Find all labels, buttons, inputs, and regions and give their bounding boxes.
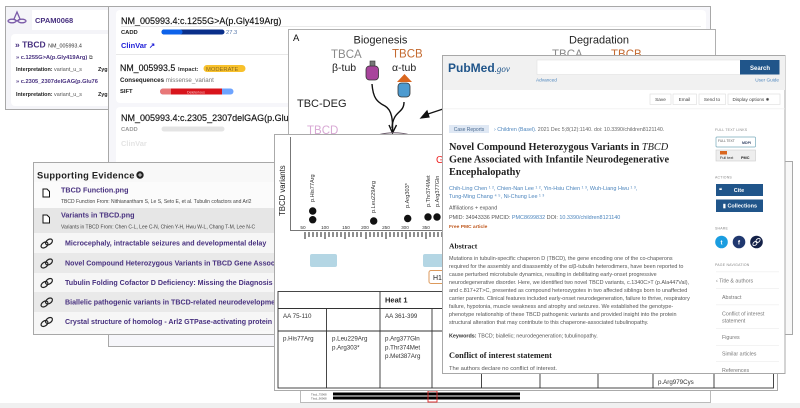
sidebar: actions: ACTIONS: [715, 176, 732, 180]
sidebar: share icons: [715, 226, 763, 248]
sidebar: page navigation: Similar articles: [722, 352, 757, 358]
domain blocks: [310, 254, 449, 267]
icon: tri-lobed logo: [8, 12, 26, 23]
variant title 2: NM_005993.4:c.2305_2307delGAG(p.Glu769del): [121, 113, 319, 123]
arrow from right: [421, 109, 443, 118]
CADD score bar: [121, 30, 237, 36]
toolbar buttons: [650, 94, 780, 104]
row: link biallelic: Biallelic pathogenic variants in TBCD-related neurodevelopmental: [65, 298, 288, 306]
sidebar: share icons: SHARE: [715, 226, 729, 230]
CADD score bar: CADD: [121, 30, 138, 36]
abstract body: required for the assembly and disassembly of the α/β-tubulin heterodimers, have been reported to: [449, 264, 683, 270]
case id: CPAM0068: [35, 16, 73, 25]
conflict heading: Conflict of interest statement: [449, 351, 552, 360]
sequence labels: Tbcd_75968: [311, 392, 327, 396]
heading: Biogenesis: Biogenesis: [354, 34, 408, 46]
gene heading: » TBCD NM_005993.4: [15, 40, 82, 50]
cell: His77Arg: p.His77Arg: [283, 336, 314, 342]
sidebar: actions: Cite: [734, 188, 744, 194]
panel: TBCD variants chart and table: [274, 134, 778, 390]
heading: Degradation: Degradation: [569, 34, 629, 46]
H1 box: H1: [433, 275, 442, 282]
axis labels: [300, 225, 430, 230]
sidebar: full text links: MDPI: [742, 141, 751, 145]
row: Variants in TBCD file: Variants in TBCD From: Chen C-L, Lee C-N, Chien Y-H, Hwu W-L, Chang T-M, Lee N-C: [61, 224, 256, 230]
search links: Advanced: [536, 78, 557, 82]
variant labels: p.Leu229Arg: [371, 181, 377, 213]
variant labels: [310, 174, 441, 213]
icon: beta tubulin: [366, 61, 378, 80]
row: link folding cofactor: [40, 277, 273, 289]
row: TBCD Function file: [43, 186, 252, 205]
toolbar buttons: Display options ✹: [732, 97, 770, 102]
transcript and impact: [120, 63, 246, 73]
cell: Leu229Arg and Arg303: p.Leu229Arg: [332, 336, 367, 342]
search box: Search: [750, 66, 770, 72]
row: link compound heterozygous: [40, 258, 291, 269]
H1 box: [429, 270, 449, 284]
keywords: Keywords: TBCD; biallelic; neurodegeneration; tubulinopathy.: [449, 334, 598, 340]
toolbar buttons: Email: [679, 97, 690, 102]
axis labels: 250: [382, 225, 390, 230]
search links: User Guide: [755, 78, 779, 82]
TBCD label: TBCD: [307, 125, 338, 137]
cell: Arg377Gln group: p.Thr374Met: [385, 344, 420, 352]
TBCB degradation label: TBCB: [611, 49, 642, 61]
cell: AA 75-110: AA 75-110: [283, 313, 312, 320]
row: link microcephaly: Microcephaly, intractable seizures and developmental delay: [65, 240, 266, 248]
abstract body: phenotype relationship of these TBCD pathogenic variants and provided insight into the protein: [449, 312, 676, 318]
sidebar: page navigation: ‹ Title & authors: [716, 278, 753, 284]
abstract body: cause perturbed microtubule dynamics, resulting in debilitating early-onset progressive: [449, 272, 657, 278]
TBCB label: TBCB: [392, 48, 423, 60]
axis labels: 300: [401, 225, 409, 230]
sidebar: page navigation: Figures: [722, 335, 740, 341]
article title: Encephalopathy: [449, 167, 521, 178]
cell: Leu229Arg and Arg303: p.Arg303*: [332, 344, 360, 352]
row: link compound heterozygous: Novel Compound Heterozygous Variants in TBCD Gene Associated: [65, 260, 291, 268]
interpretation 2: Interpretation: variant_u_s: [16, 92, 82, 98]
ClinVar link: ClinVar ↗: [121, 41, 155, 50]
axis labels: 150: [342, 225, 350, 230]
sidebar: full text links: FULL TEXT LINKS: [715, 128, 748, 132]
affiliations: Affiliations + expand: [449, 206, 497, 212]
cell: Arg377Gln group: p.Arg377Gln: [385, 336, 420, 342]
panel: right backing sheet: [500, 162, 792, 334]
red G mark: G: [436, 155, 444, 166]
transcript and impact: MODERATE: [206, 67, 239, 73]
abstract body: Mutations in tubulin-specific chaperon D (TBCD), the gene encoding one of the co-chaperons: [449, 256, 673, 262]
row: link crystal structure: [40, 316, 272, 328]
TBCA degradation label: TBCA: [552, 49, 583, 61]
heading: Supporting Evidence: [37, 170, 135, 180]
CADD score bar: 27.3: [226, 30, 237, 36]
axis labels: 200: [361, 225, 369, 230]
sequence labels: [311, 392, 327, 400]
panel: CPAM case summary: [6, 6, 126, 110]
article type pill: Case Reports: [454, 127, 485, 133]
sequence bars: [333, 391, 520, 402]
abstract body: carrier parents. Clinical features included early-onset neurodegeneration, failure to thrive, respiratory: [449, 296, 690, 302]
alpha tubulin label: α-tub: [392, 62, 416, 74]
sidebar: page navigation: PAGE NAVIGATION: [715, 263, 750, 267]
row: Variants in TBCD file: Variants in TBCD.png: [61, 210, 134, 220]
muted CADD: CADD: [121, 127, 138, 133]
row: link microcephaly: [40, 238, 266, 249]
dome outline: [378, 133, 410, 135]
sidebar: page navigation: Conflict of interest: [722, 312, 764, 318]
panel: PubMed article page: [442, 56, 785, 374]
toolbar buttons: Send to: [704, 97, 720, 102]
axis labels: 350: [422, 225, 430, 230]
article title: Gene Associated with Infantile Neurodegenerative: [449, 154, 669, 166]
muted CADD: [121, 126, 224, 133]
sidebar: share icons: f: [738, 240, 741, 246]
search links: [536, 78, 779, 82]
cell: Arg979Cys: p.Arg979Cys: [658, 379, 694, 386]
abstract heading: Abstract: [449, 242, 478, 250]
SIFT bar: SIFT: [120, 89, 133, 95]
panel letter: A: [293, 33, 300, 44]
sidebar: full text links: PMC: [741, 156, 750, 160]
interpretation 1: Zyg: [98, 67, 108, 73]
abstract body: failure, hypotonia, muscle weakness and atrophy and seizures. We established the genotype-: [449, 304, 673, 310]
row: Variants in TBCD file: [43, 210, 256, 230]
table: heat repeats: [278, 292, 774, 388]
muted ClinVar: ClinVar: [121, 139, 147, 148]
row: link crystal structure: Crystal structure of homolog - Arl2 GTPase-activating protein: [65, 318, 272, 326]
abstract body: and c.817+2T>C, presented as compound heterozygotes in two affected siblings born to unaffected: [449, 288, 687, 294]
row: TBCD Function file: TBCD Function From: Nithianantham S, Le S, Seto E, et al. Tubulin cofactors and Arl2: [61, 199, 252, 205]
authors: Tung-Ming Chang ⁴ ⁵, Ni-Chung Lee ¹ ³: [449, 193, 544, 200]
logo: PubMed.gov: PubMed.gov: [448, 61, 510, 75]
axis labels: 100: [321, 225, 329, 230]
free PMC tag: Free PMC article: [449, 224, 488, 230]
icon: plus: [136, 171, 144, 179]
column heading: Heat 1: [385, 296, 408, 304]
toolbar buttons: Save: [655, 97, 666, 102]
row: TBCD Function file: TBCD Function.png: [61, 186, 128, 194]
variant labels: p.Thr374Met: [426, 175, 432, 207]
cell: AA 361-399: AA 361-399: [385, 313, 418, 320]
cell: Arg377Gln group: p.Met387Arg: [385, 353, 421, 360]
abstract body: neurodegenerative disorder. Here, we identified two novel TBCD variants, c.1340C>T (p.Ala447Val),: [449, 280, 690, 286]
variant title 1: NM_005993.4:c.1255G>A(p.Gly419Arg): [121, 16, 281, 26]
interpretation 2: Zyg: [98, 92, 108, 98]
article type pill: [449, 125, 489, 133]
variant dots: [309, 207, 441, 225]
variant labels: p.Arg377Gln: [435, 176, 441, 207]
sidebar: page navigation: [715, 263, 779, 374]
SIFT bar: [120, 88, 234, 95]
sidebar: share icons: t: [720, 240, 722, 246]
beta tubulin label: β-tub: [332, 62, 356, 74]
sidebar: actions: ❝: [719, 187, 722, 194]
panel: variant annotation: [108, 6, 710, 346]
panel: supporting evidence: [34, 162, 291, 334]
sidebar: full text links: [715, 128, 756, 161]
interpretation 1: Interpretation: variant_u_s: [16, 67, 82, 73]
identifiers: PMID: 34943336 PMCID: PMC8699832 DOI: 10.3390/children8121140: [449, 215, 620, 221]
sidebar: actions: ▮ Collections: [723, 204, 757, 210]
authors: Chih-Ling Chen ¹ ², Chien-Nan Lee ¹ ², Yin-Hsiu Chien ¹ ³, Wuh-Liang Hwu ¹ ³,: [449, 186, 637, 192]
sidebar: page navigation: statement: [722, 318, 746, 324]
panel: A tubulin biogenesis diagram: [288, 30, 716, 230]
sidebar: page navigation: References: [722, 368, 749, 374]
transcript and impact: NM_005993.5: [120, 63, 175, 73]
sequence labels: Tbcd_90968: [311, 396, 327, 400]
variant 1: » c.1255G>A(p.Gly419Arg) ⧉: [16, 55, 93, 61]
variant labels: p.His77Arg: [310, 174, 316, 202]
transcript and impact: Impact:: [178, 67, 199, 73]
sidebar: page navigation: Abstract: [722, 295, 742, 301]
y axis title: TBCD variants: [278, 165, 287, 216]
variant 2: » c.2305_2307delGAG(p.Glu76: [16, 79, 98, 85]
sidebar: actions: [715, 176, 763, 212]
article title: Novel Compound Heterozygous Variants in TBCD: [449, 142, 668, 153]
TBC-DEG label: TBC-DEG: [297, 98, 346, 110]
row: link biallelic: [40, 297, 288, 308]
sidebar: full text links: Full text: [720, 156, 734, 160]
variant labels: p.Arg303*: [405, 182, 411, 208]
consequences: Consequences missense_variant: [120, 77, 214, 84]
row: link folding cofactor: Tubulin Folding Cofactor D Deficiency: Missing the Diagnosis: [65, 279, 273, 287]
sidebar: full text links: FULL TEXT: [718, 139, 735, 143]
conflict text: The authors declare no conflict of interest.: [449, 366, 557, 372]
panel: bottom sequence strip: [300, 380, 710, 402]
axis labels: 50: [300, 225, 306, 230]
arrows converging: [372, 84, 404, 133]
TBCA label: TBCA: [331, 49, 362, 61]
SIFT bar: Deleterious: [187, 90, 205, 94]
citation: › Children (Basel). 2021 Dec 5;8(12):1140. doi: 10.3390/children8121140.: [494, 127, 664, 133]
abstract body: structural alteration that may contribute to this chaperone-associated tubulinopathy.: [449, 320, 649, 326]
icon: alpha tubulin: [397, 74, 412, 97]
search box: [537, 60, 780, 74]
chart: lollipop variants: [278, 137, 450, 284]
